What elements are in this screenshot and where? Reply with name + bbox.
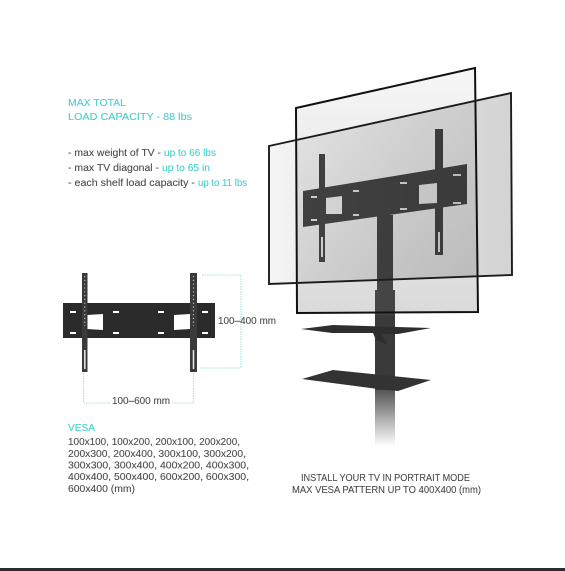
VESA sizes list: 400x400, 500x400, 600x200, 600x300, [68,471,249,483]
stand with shelves and TV outlines [269,68,512,446]
portrait mode caption: INSTALL YOUR TV IN PORTRAIT MODE [301,472,470,484]
landscape TV fill [269,93,512,284]
text block: capacity list: up to 11 lbs [198,177,247,189]
heading: max total load capacity: MAX TOTAL [68,97,126,109]
mount seen through TV [303,129,467,315]
VESA sizes list: 300x300, 300x400, 400x200, 400x300, [68,460,249,472]
heading: max total load capacity [68,97,192,123]
landscape TV outline [269,93,512,284]
portrait mode caption: MAX VESA PATTERN UP TO 400X400 (mm) [292,484,481,496]
portrait TV outline [296,68,478,313]
text block: capacity list: - max TV diagonal - [68,162,159,174]
VESA sizes list: 200x300, 200x400, 300x100, 300x200, [68,448,246,460]
dimension label: width: 100–600 mm [112,395,170,407]
text block: capacity list: up to 65 in [162,162,210,174]
VESA sizes list [68,436,249,495]
portrait mode caption [292,472,481,496]
heading: max total load capacity: LOAD CAPACITY - 88 lbs [68,111,192,123]
upper shelf [301,325,431,344]
dimension label: height: 100–400 mm [218,315,276,327]
mount rails [82,273,197,372]
text block: capacity list: - max weight of TV - [68,147,161,159]
text block: capacity list: up to 66 lbs [164,147,216,159]
bottom bar [0,568,565,571]
mount plate [63,303,215,338]
VESA mount diagram [63,273,276,407]
VESA heading: VESA [68,422,95,434]
portrait TV fill [296,68,478,313]
VESA sizes list: 100x100, 100x200, 200x100, 200x200, [68,436,240,448]
stand pole [375,293,395,446]
text block: capacity list: - each shelf load capacity - [68,177,196,189]
mount openings [70,311,208,334]
dimension lines [84,275,241,403]
VESA sizes list: 600x400 (mm) [68,483,135,495]
lower shelf [302,370,431,391]
text block: capacity list [68,147,247,189]
